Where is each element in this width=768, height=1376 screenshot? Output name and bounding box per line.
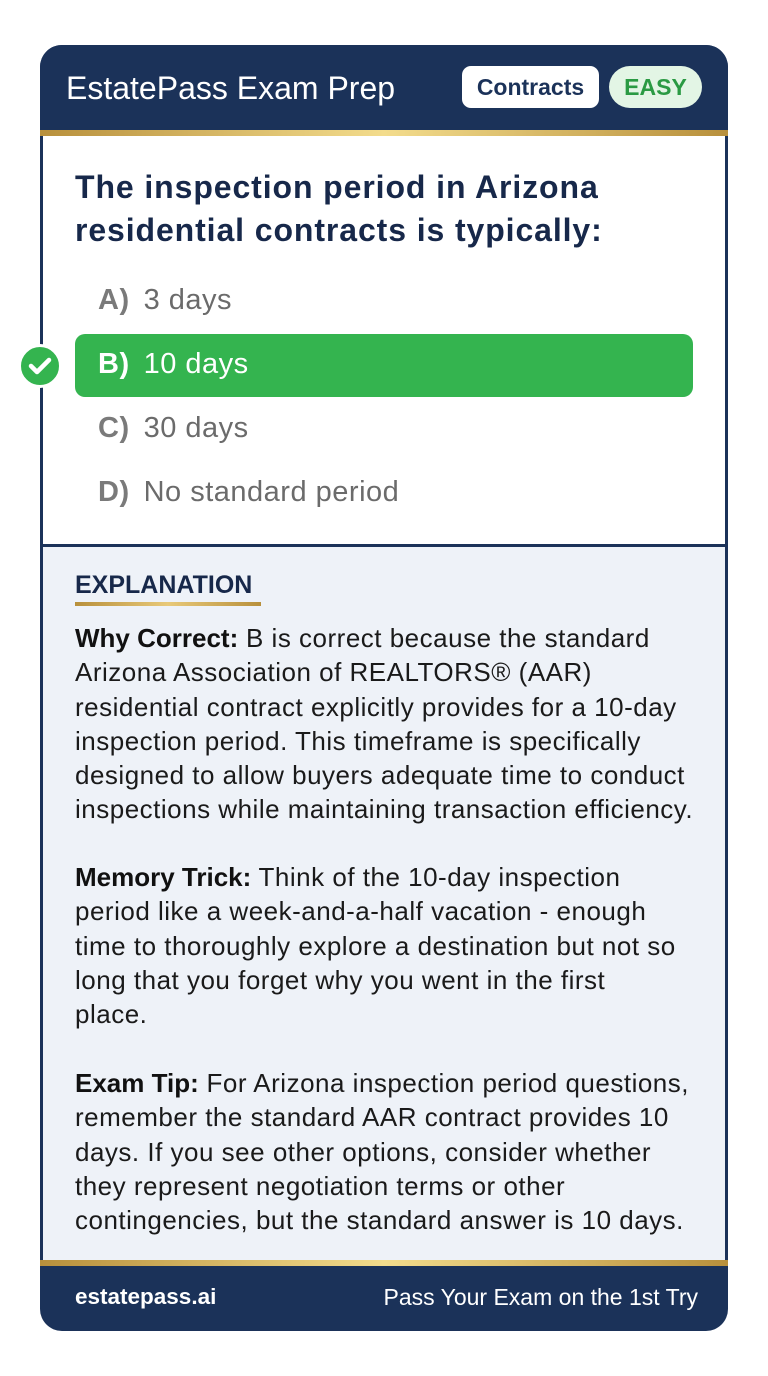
- memory trick: [75, 862, 676, 1029]
- option B correct: [75, 334, 693, 397]
- footer: [75, 1284, 698, 1310]
- question text: residential contracts is typically:: [75, 212, 603, 248]
- explanation heading: EXPLANATION: [75, 571, 252, 599]
- why correct: Arizona Association of REALTORS® (AAR): [75, 657, 592, 687]
- option A: A) 3 days: [98, 284, 232, 316]
- why correct: Why Correct: B is correct because the standard: [75, 623, 650, 653]
- exam tip: Exam Tip: For Arizona inspection period questions,: [75, 1068, 689, 1098]
- memory trick: place.: [75, 999, 147, 1029]
- question text: The inspection period in Arizona: [75, 169, 599, 205]
- header: [40, 45, 728, 130]
- exam tip: contingencies, but the standard answer is 10 days.: [75, 1205, 684, 1235]
- option C: C) 30 days: [98, 412, 249, 444]
- badge: contracts: Contracts: [477, 74, 584, 100]
- question panel: [43, 136, 725, 544]
- memory trick: time to thoroughly explore a destination but not so: [75, 931, 676, 961]
- memory trick: period like a week-and-a-half vacation - enough: [75, 896, 646, 926]
- exam tip: days. If you see other options, consider whether: [75, 1137, 651, 1167]
- why correct: [75, 623, 693, 824]
- explanation panel: [43, 547, 725, 1260]
- why correct: inspections while maintaining transaction efficiency.: [75, 794, 693, 824]
- question text: [75, 169, 603, 248]
- memory trick: Memory Trick: Think of the 10-day inspection: [75, 862, 620, 892]
- why correct: designed to allow buyers adequate time to conduct: [75, 760, 685, 790]
- footer url: estatepass.ai: [75, 1284, 216, 1309]
- memory trick: long that you forget why you went in the first: [75, 965, 605, 995]
- question panel: B) 10 days: [98, 348, 249, 380]
- badge: easy: EASY: [624, 74, 687, 100]
- exam tip: [75, 1068, 689, 1235]
- exam tip: they represent negotiation terms or other: [75, 1171, 565, 1201]
- icon: check: [18, 344, 62, 388]
- badge: contracts: [462, 66, 599, 108]
- exam tip: remember the standard AAR contract provides 10: [75, 1102, 669, 1132]
- why correct: inspection period. This timeframe is specifically: [75, 726, 641, 756]
- option D: D) No standard period: [98, 476, 399, 508]
- why correct: residential contract explicitly provides for a 10-day: [75, 692, 677, 722]
- badge: easy: [609, 66, 702, 108]
- footer tagline: Pass Your Exam on the 1st Try: [384, 1284, 698, 1310]
- title: EstatePass Exam Prep: [66, 70, 395, 106]
